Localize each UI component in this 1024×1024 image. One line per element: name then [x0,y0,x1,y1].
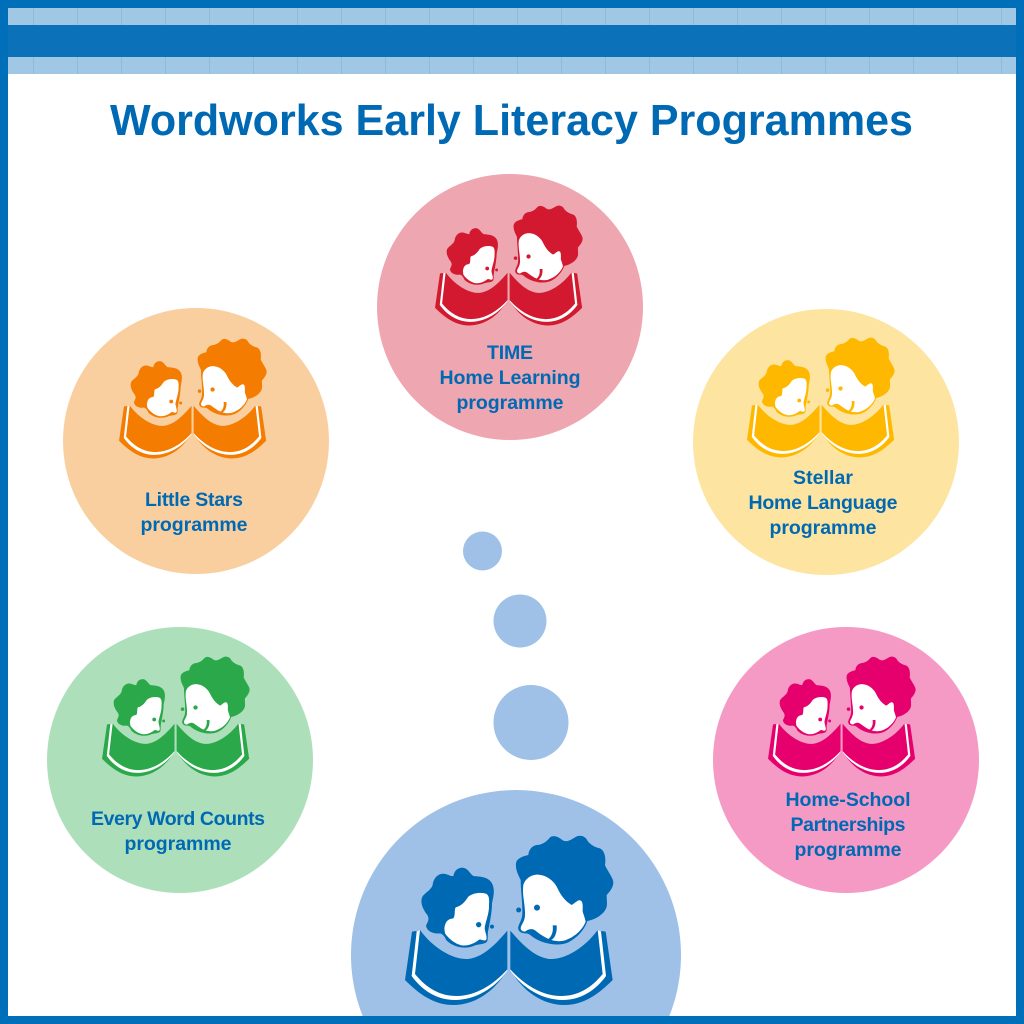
panel: TIME Home Learning programme [377,174,643,440]
panel: Home-School Partnerships programme [713,627,979,893]
panel: Every Word Counts programme [47,627,313,893]
panel: Stellar Home Language programme [693,309,959,575]
header band [8,8,1016,74]
panel: main Wordworks circle [351,790,681,1024]
label: Stellar Home Language programme: programme [770,517,877,539]
label: Home-School Partnerships programme: programme [794,839,902,861]
title: Wordworks Early Literacy Programmes [110,96,913,145]
label: Little Stars programme: Little Stars [145,489,243,511]
label: Every Word Counts programme: programme [124,833,232,855]
icon: TIME reader and child with book [435,206,583,325]
label: Stellar Home Language programme: Home Language [748,492,898,514]
label: TIME Home Learning programme: Home Learning [440,367,580,389]
icon: Little Stars reader and child with book [119,339,267,458]
label: Little Stars programme: programme [140,514,248,536]
label: Every Word Counts programme: Every Word Counts [91,808,265,830]
panel: Little Stars programme [63,308,329,574]
label: Stellar Home Language programme: Stellar [793,467,853,489]
label: Home-School Partnerships programme: Home-School [786,789,910,811]
icon: Every Word Counts reader and child with book [102,657,250,776]
icon: Home-School reader and child with book [768,657,916,776]
label: Home-School Partnerships programme: Partnerships [790,814,906,836]
icon: main reader and child with book [405,836,613,1005]
label: TIME Home Learning programme: TIME [487,342,533,364]
label: TIME Home Learning programme: programme [456,392,564,414]
icon: Stellar reader and child with book [747,338,895,457]
thought bubbles [463,532,568,760]
